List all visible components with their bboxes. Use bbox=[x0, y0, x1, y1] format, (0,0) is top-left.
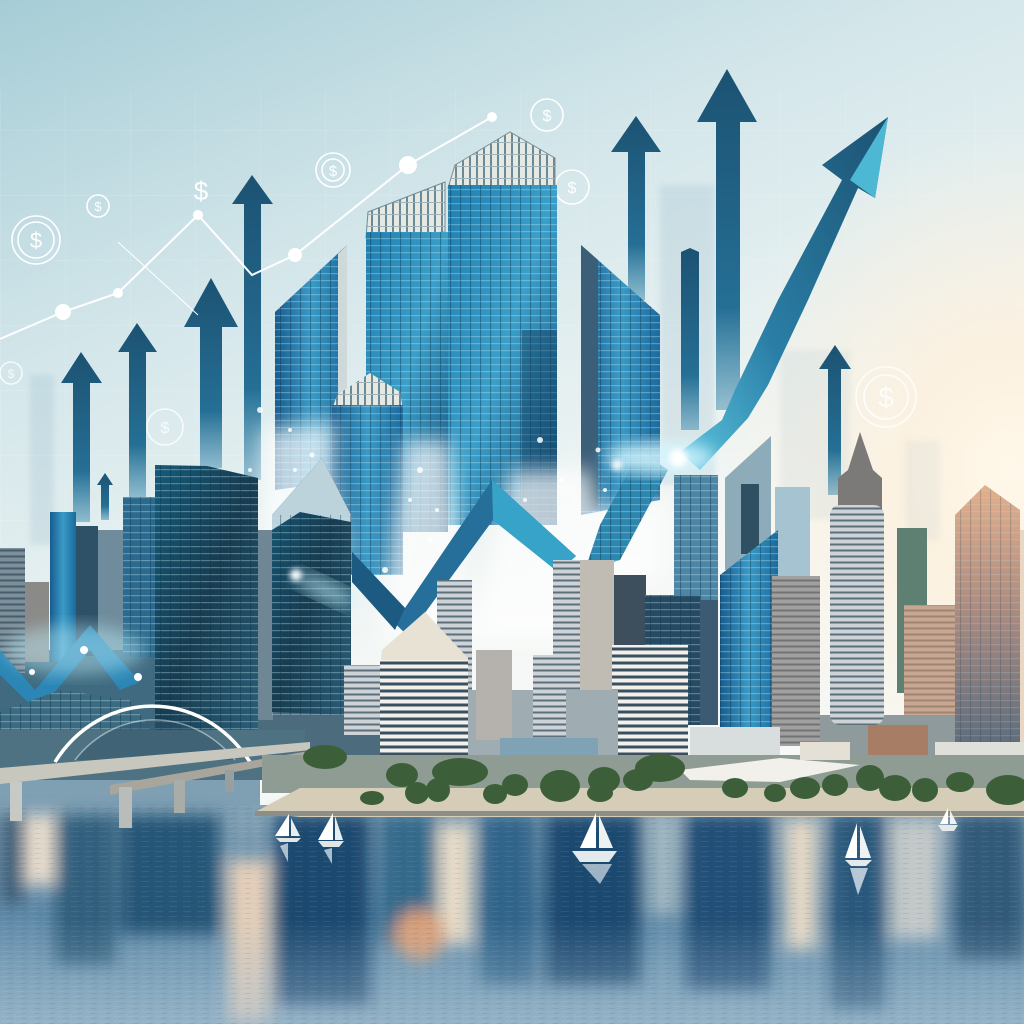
coin near crown bbox=[555, 170, 589, 204]
coin right bbox=[856, 367, 916, 427]
low block bbox=[344, 665, 380, 735]
reflections bbox=[0, 815, 1024, 1024]
coin upper bbox=[316, 153, 350, 187]
sailboat 4 bbox=[845, 823, 872, 895]
left sparkling chevron bbox=[0, 625, 145, 712]
left lower skyline bbox=[0, 458, 383, 755]
orange block bbox=[904, 605, 955, 715]
coin left large: $ bbox=[30, 228, 42, 253]
main glass towers bbox=[275, 132, 660, 575]
blue glass block bbox=[720, 530, 778, 732]
background towers bbox=[674, 436, 810, 605]
coin small left bbox=[87, 195, 109, 217]
central zigzag arrow bbox=[352, 480, 576, 636]
arrow 2 bbox=[118, 323, 157, 497]
striped tower pair bbox=[553, 560, 718, 740]
shore base behind bridge bbox=[0, 730, 305, 780]
building cluster far left bbox=[0, 497, 155, 673]
coin edge bbox=[0, 362, 22, 384]
coin edge: $ bbox=[8, 367, 15, 381]
sailboats bbox=[275, 808, 958, 895]
brown block bbox=[772, 576, 820, 746]
second tower bbox=[366, 182, 448, 532]
arrow 7 bbox=[819, 345, 851, 495]
arrow 1 bbox=[61, 352, 102, 522]
glass dome far left bbox=[0, 690, 155, 735]
coin small left: $ bbox=[94, 199, 102, 214]
white office block bbox=[612, 645, 688, 763]
glow sparks bbox=[290, 442, 715, 613]
central white building bbox=[380, 580, 618, 766]
coin top: $ bbox=[543, 108, 552, 125]
coin icons bbox=[0, 99, 916, 445]
small mid tower bbox=[332, 373, 403, 575]
coin top bbox=[531, 99, 563, 131]
dissolving mist and particles bbox=[248, 407, 670, 640]
coin near crown: $ bbox=[568, 180, 577, 197]
low podium bbox=[690, 727, 780, 757]
warm tall tower bbox=[955, 485, 1020, 745]
filler base bbox=[820, 715, 1024, 770]
sailboat 2 bbox=[318, 813, 344, 864]
arrow 3 bbox=[184, 278, 238, 468]
arrow 6 bbox=[697, 69, 757, 410]
dark tower with white top bbox=[272, 458, 351, 715]
sailboat 1 bbox=[275, 814, 301, 862]
right tower bbox=[581, 245, 660, 515]
trees bbox=[303, 745, 1024, 805]
faint distant towers bbox=[30, 185, 940, 545]
arrow 5 bbox=[611, 116, 661, 300]
sailboat 5 bbox=[938, 808, 958, 831]
waterfront promenade bbox=[255, 725, 1024, 817]
sailboat 3 bbox=[572, 813, 617, 884]
coin upper: $ bbox=[329, 163, 338, 180]
dark tall tower bbox=[155, 465, 258, 735]
central tower bbox=[448, 132, 557, 525]
centre right skyline bbox=[553, 436, 820, 763]
left tower bbox=[275, 245, 347, 490]
big diagonal arrow bbox=[585, 117, 888, 570]
coin left large bbox=[12, 216, 60, 264]
right towers bbox=[820, 432, 1024, 770]
filler base bbox=[468, 690, 618, 755]
striped spire tower bbox=[830, 432, 884, 725]
filler base bbox=[0, 650, 160, 750]
narrow dark tower bbox=[897, 528, 927, 693]
rising arrows bbox=[61, 69, 851, 522]
arrow 4 bbox=[232, 175, 273, 480]
bridge bbox=[0, 706, 315, 828]
coin dollar mark: $ bbox=[194, 176, 209, 206]
coin mid left: $ bbox=[161, 420, 170, 437]
coin right: $ bbox=[878, 382, 894, 413]
trend line with nodes bbox=[0, 112, 497, 339]
small arrow bbox=[97, 473, 113, 520]
coin mid left bbox=[147, 409, 183, 445]
arrow 8 bbox=[681, 248, 699, 430]
water bbox=[0, 780, 1024, 1024]
